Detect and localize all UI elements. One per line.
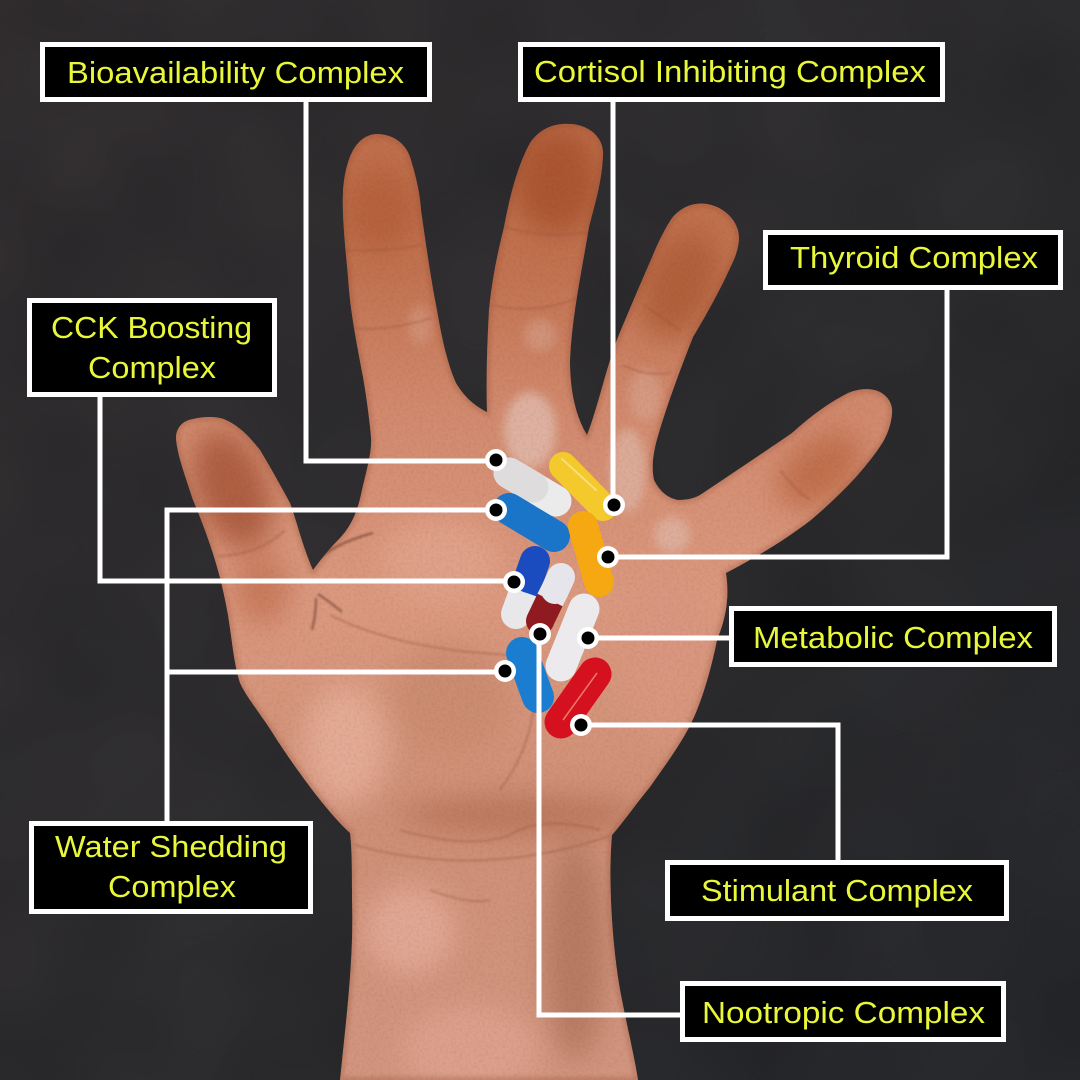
line: thyroid xyxy=(608,290,947,557)
line: nootropic xyxy=(539,634,680,1015)
dot: nootropic xyxy=(529,623,551,645)
line: bioavailability xyxy=(306,102,496,461)
dot: water shedding upper xyxy=(485,499,507,521)
line: cortisol xyxy=(610,102,616,505)
capsule: blue water shedding lower xyxy=(522,653,538,697)
hand photo xyxy=(170,120,900,1080)
dot: bioavailability xyxy=(485,449,507,471)
label: Thyroid Complex: Thyroid Complex xyxy=(790,240,1039,275)
capsule: white metabolic xyxy=(561,609,584,666)
label: Nootropic Complex xyxy=(682,984,1004,1040)
capsule: white and dark red nootropic xyxy=(540,577,561,621)
label: CCK Boosting Complex: CCK Boosting xyxy=(51,310,252,345)
hand edge shading xyxy=(176,124,892,1080)
dot: water shedding lower xyxy=(494,660,516,682)
label: Cortisol Inhibiting Complex xyxy=(520,44,942,100)
dot: stimulant xyxy=(570,714,592,736)
label: CCK Boosting Complex: Complex xyxy=(88,350,217,385)
dot: thyroid xyxy=(597,546,619,568)
thumb web fold xyxy=(312,533,373,630)
label: Stimulant Complex: Stimulant Complex xyxy=(701,873,974,908)
capsule: blue water shedding xyxy=(509,509,554,536)
connector lines xyxy=(100,102,947,1015)
skin creases xyxy=(218,225,810,901)
label: Thyroid Complex xyxy=(766,232,1060,288)
marker dots xyxy=(485,449,625,736)
label: Water Shedding Complex: Complex xyxy=(108,869,237,904)
label: Bioavailability Complex: Bioavailability Complex xyxy=(67,55,405,90)
label: Water Shedding Complex: Water Shedding xyxy=(55,829,287,864)
capsule: red stimulant xyxy=(561,673,597,722)
dot: metabolic xyxy=(577,627,599,649)
label: Bioavailability Complex xyxy=(42,44,430,100)
capsule: orange thyroid xyxy=(583,526,599,582)
capsule: blue and white CCK xyxy=(516,561,535,614)
line: metabolic xyxy=(588,636,729,640)
label: Stimulant Complex xyxy=(668,862,1006,918)
fingertips and thumb shading xyxy=(177,126,876,1080)
line: water shedding xyxy=(167,510,505,821)
label: Cortisol Inhibiting Complex: Cortisol Inhibiting Complex xyxy=(534,54,927,89)
line: CCK xyxy=(100,397,514,581)
dot: CCK xyxy=(503,571,525,593)
capsule: white bioavailability xyxy=(509,473,556,501)
skin grain xyxy=(229,316,850,1078)
dot: cortisol xyxy=(603,494,625,516)
label: Metabolic Complex: Metabolic Complex xyxy=(753,620,1034,655)
label: Water Shedding Complex xyxy=(32,824,310,912)
chalk on palm xyxy=(408,305,690,553)
capsule: yellow cortisol xyxy=(562,459,603,507)
capsules xyxy=(509,459,603,722)
label: Nootropic Complex: Nootropic Complex xyxy=(702,995,986,1030)
label: Metabolic Complex xyxy=(732,608,1054,664)
line: stimulant xyxy=(581,725,838,860)
label: CCK Boosting Complex xyxy=(30,300,274,394)
